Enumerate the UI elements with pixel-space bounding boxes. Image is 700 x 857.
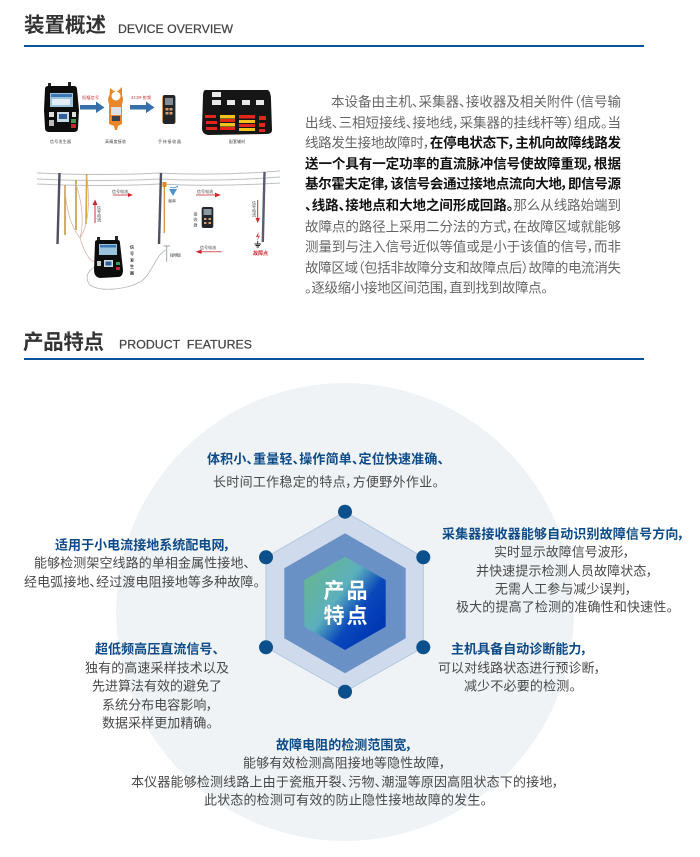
- arrow: signal current down: 信号电流: [251, 200, 257, 218]
- pink test leads: [65, 176, 97, 262]
- feature: ultra low frequency: 独有的高速采样技术以及: [85, 658, 229, 676]
- description text block: 基尔霍夫定律，该信号会通过接地点流向大地，即信号源: [305, 172, 622, 192]
- description text block: [305, 90, 622, 296]
- feature: small current grounding: [24, 534, 260, 590]
- feature: fault resistance range: [131, 734, 559, 808]
- feature: small current grounding: 经电弧接地、经过渡电阻接地等多种故障。: [24, 572, 260, 590]
- feature: ultra low frequency: 系统分布电容影响，: [102, 694, 213, 714]
- center label: 特点: [324, 600, 368, 630]
- heading: product features: [23, 325, 644, 360]
- feature: fault resistance range: 能够有效检测高阻接地等隐性故障，: [243, 752, 446, 772]
- arrow: signal current right 1: 信号电流: [112, 188, 128, 195]
- label: receiver sensor: 高精度接收: [105, 138, 126, 145]
- label: handheld receiver: 手持接收器: [158, 138, 181, 145]
- icon: handheld in field: [202, 207, 213, 228]
- feature: fault resistance range: 故障电阻的检测范围宽，: [276, 734, 413, 754]
- feature: self diagnosis: 可以对线路状态进行预诊断，: [438, 658, 601, 676]
- feature: compact: 体积小、重量轻、操作简单、定位快速准确、: [207, 448, 444, 468]
- arrow: 433M radio: 433M 射频: [131, 94, 151, 101]
- arrow: signal current left: 信号电流: [200, 244, 216, 251]
- feature: fault resistance range: 本仪器能够检测线路上由于瓷瓶开裂、污物、潮湿等原因高阻状态下的接地，: [131, 772, 559, 790]
- icon: accessory kit: [202, 90, 272, 135]
- wiring schematic: [37, 171, 280, 289]
- feature: self diagnosis: 主机具备自动诊断能力，: [451, 638, 588, 658]
- arrow: signal current up: 信号电流: [96, 205, 102, 223]
- description text block: 、线路、接地点和大地之间形成回路。那么从线路始端到: [305, 194, 621, 214]
- feature: ultra low frequency: [85, 638, 229, 732]
- heading: product features: PRODUCT FEATURES: [119, 338, 252, 352]
- arrow: signal current right 1: [112, 188, 133, 197]
- label: signal generator vertical: 信号发生器: [129, 244, 135, 276]
- icon: clamp sensor: [108, 87, 123, 130]
- background circle: [116, 383, 574, 841]
- feature: automatic recognition: 并快速提示检测人员故障状态，: [476, 560, 653, 580]
- label: accessories: 配套辅材: [229, 138, 245, 145]
- center label: 产品: [324, 575, 368, 605]
- grey earth wire: [87, 250, 166, 289]
- feature: ultra low frequency: 先进算法有效的避免了: [92, 676, 222, 694]
- icon: fault point: 故障点: [253, 250, 268, 257]
- icon: field generator case: [94, 236, 123, 278]
- icon: handheld receiver: [162, 95, 176, 124]
- icon: wireless symbol: [168, 186, 178, 204]
- feature: compact: 长时间工作稳定的特点，方便野外作业。: [213, 472, 439, 490]
- description text block: 测量到与注入信号近似等值或是小于该值的信号，而非: [305, 236, 621, 256]
- description text block: 送一个具有一定功率的直流脉冲信号使故障重现，根据: [305, 152, 621, 172]
- hexagon node dots: [259, 505, 430, 699]
- feature: fault resistance range: 此状态的检测可有效的防止隐性接地故障的发生。: [204, 790, 487, 808]
- arrow: signal current left: [196, 244, 222, 254]
- heading: device overview: 装置概述: [24, 8, 106, 38]
- feature: automatic recognition: [442, 524, 685, 616]
- arrow: signal current right 2: [196, 188, 221, 197]
- arrow: pulse signal: [80, 94, 104, 113]
- inner gradient hexagon: [304, 557, 386, 650]
- outer hexagon: [266, 512, 423, 692]
- heading: device overview: [24, 8, 644, 47]
- hexagon diagram: [259, 505, 430, 699]
- icon: ground rod: 接地极: [170, 252, 181, 258]
- feature: automatic recognition: 实时显示故障信号波形，: [494, 542, 630, 560]
- feature: automatic recognition: 无需人工参与减少误判，: [495, 578, 632, 598]
- description text block: 出线、三相短接线、接地线，采集器的挂线杆等）组成。当: [305, 112, 621, 132]
- arrow: 433M radio: [130, 94, 154, 113]
- center label: [324, 575, 368, 630]
- arrow: pulse signal: 短幅信号: [82, 94, 99, 101]
- label: receiver vertical: 接收器: [192, 211, 198, 228]
- description text block: 故障点的路径上采用二分法的方式，在故障区域就能够: [305, 216, 622, 236]
- feature: ultra low frequency: 超低频高压直流信号、: [95, 638, 219, 658]
- feature: small current grounding: 能够检测架空线路的单相金属性接地、: [34, 552, 250, 572]
- icon: ground rod: [164, 246, 181, 262]
- feature: automatic recognition: 极大的提高了检测的准确性和快速性。: [456, 596, 673, 616]
- icon: fault point: [253, 232, 268, 257]
- icon: wireless symbol: 频率: [168, 198, 176, 204]
- poles: [58, 172, 264, 244]
- heading: device overview: DEVICE OVERVIEW: [118, 22, 233, 36]
- device product photo row: [44, 82, 272, 145]
- description text block: 线路发生接地故障时，在停电状态下，主机向故障线路发: [305, 132, 622, 152]
- description text block: 本设备由主机、采集器、接收器及相关附件（信号输: [331, 90, 622, 110]
- feature: self diagnosis: 减少不必要的检测。: [464, 676, 576, 694]
- label: signal generator: 信号发生器: [50, 138, 71, 145]
- feature: compact: [207, 448, 444, 490]
- icon: signal generator case: [44, 82, 79, 132]
- description text block: 。逐级缩小接地区间范围，直到找到故障点。: [305, 276, 548, 296]
- heading: product features: 产品特点: [23, 325, 104, 355]
- feature: self diagnosis: [438, 638, 601, 694]
- arrow: signal current up: [92, 200, 102, 223]
- feature: ultra low frequency: 数据采样更加精确。: [102, 712, 213, 732]
- power lines: [37, 171, 280, 186]
- arrow: signal current down: [251, 200, 260, 223]
- arrow: signal current right 2: 信号电流: [197, 188, 213, 195]
- feature: automatic recognition: 采集器接收器能够自动识别故障信号方向，: [442, 524, 685, 542]
- middle hexagon: [284, 533, 406, 673]
- description text block: 故障区域（包括非故障分支和故障点后）故障的电流消失: [305, 256, 622, 276]
- feature: small current grounding: 适用于小电流接地系统配电网，: [55, 534, 231, 554]
